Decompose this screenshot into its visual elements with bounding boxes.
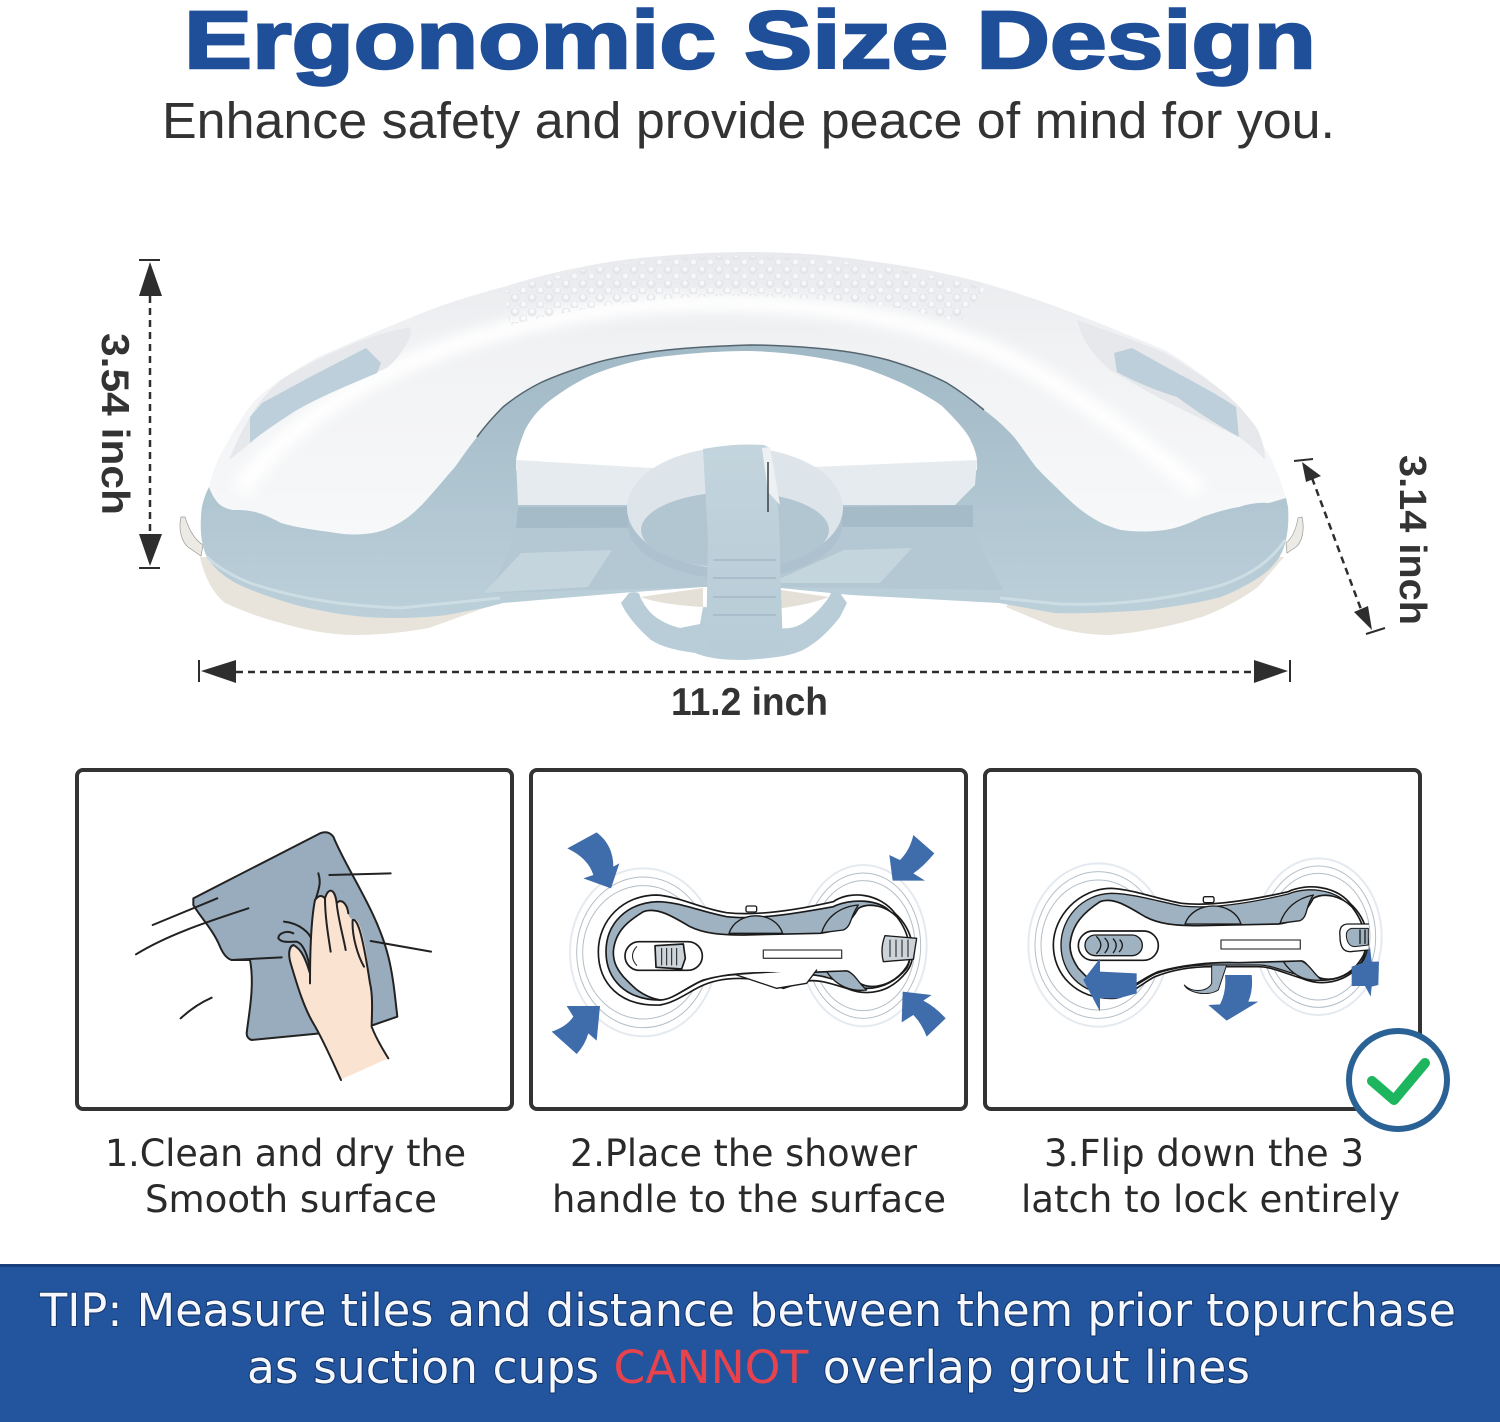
height label: 3.54 inch xyxy=(93,333,136,515)
width label: 11.2 inch xyxy=(671,681,828,724)
product: shower grab handle xyxy=(180,252,1303,660)
plate highlights xyxy=(484,548,912,593)
warning text: as suction cups CANNOT overlap grout lines xyxy=(247,1341,1250,1394)
panel 2: place handle xyxy=(531,770,966,1109)
icon: towel and hand xyxy=(136,832,431,1080)
front plate xyxy=(490,527,1003,593)
panel 3: flip latches xyxy=(985,770,1420,1109)
handle shading xyxy=(240,303,1200,490)
hole backing under base xyxy=(640,588,829,610)
caption 3: latch to lock entirely xyxy=(1021,1178,1400,1221)
caption 2: handle to the surface xyxy=(552,1178,946,1221)
caption 3: 3.Flip down the 3 xyxy=(1044,1132,1364,1175)
suction cups xyxy=(200,557,1284,635)
central disc xyxy=(627,447,843,579)
plate groove strips xyxy=(516,505,973,528)
left grip recess xyxy=(229,327,411,460)
height dimension arrow xyxy=(139,260,162,568)
handle texture xyxy=(505,256,985,325)
depth label: 3.14 inch xyxy=(1391,455,1433,625)
rim highlight xyxy=(207,540,1285,608)
side hooks xyxy=(180,517,1303,556)
tip text: TIP: Measure tiles and distance between them prior topurchase xyxy=(39,1284,1456,1337)
depth dimension arrow xyxy=(1294,459,1385,634)
arrows: press inward xyxy=(552,832,946,1054)
latch tongue xyxy=(703,444,783,657)
illustration: handle locked xyxy=(1028,858,1382,1027)
body base xyxy=(201,300,1288,618)
icon: green check badge xyxy=(1349,1031,1447,1129)
arrows: flip directions xyxy=(1083,947,1379,1021)
arch edge line xyxy=(477,345,984,437)
caption 2: 2.Place the shower xyxy=(570,1132,918,1175)
right grip recess xyxy=(1077,320,1265,460)
caption 3 xyxy=(1021,1132,1400,1221)
subtitle: Enhance safety and provide peace of mind for you. xyxy=(162,92,1335,149)
white grip handle xyxy=(209,252,1286,534)
caption 1: Smooth surface xyxy=(145,1178,437,1221)
width dimension arrow xyxy=(199,660,1290,683)
caption 1 xyxy=(105,1132,466,1221)
window under arch xyxy=(516,351,977,470)
illustration: handle with suction rings xyxy=(570,865,927,1036)
latch hook xyxy=(621,590,847,660)
rear plate xyxy=(516,460,977,505)
panel 1: clean surface xyxy=(77,770,512,1109)
caption 2 xyxy=(552,1132,946,1221)
caption 1: 1.Clean and dry the xyxy=(105,1132,466,1175)
tip banner xyxy=(0,1264,1500,1422)
